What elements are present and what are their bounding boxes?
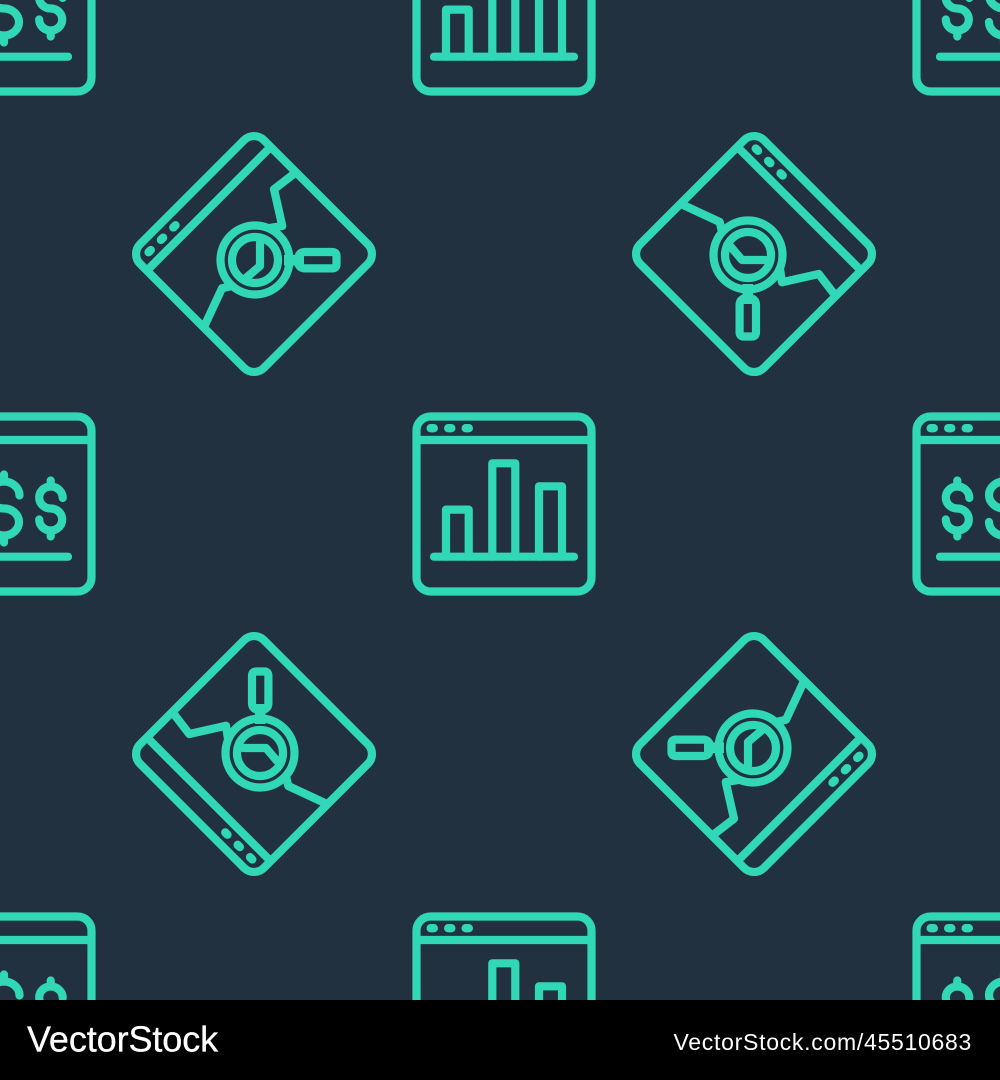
icon: diamond window with magnifier, handle right <box>130 130 378 378</box>
icon: bar chart window, bottom centre <box>416 916 592 1080</box>
window frame <box>630 130 878 378</box>
icon: diamond window with magnifier, handle left <box>630 630 878 878</box>
icon: dollar window, middle left <box>0 416 92 592</box>
magnifier with pie chart <box>714 220 782 336</box>
bar chart <box>434 463 574 557</box>
crack lines <box>172 712 328 804</box>
icon: dollar window, bottom left <box>0 916 92 1080</box>
icon: diamond window with magnifier, handle up <box>130 630 378 878</box>
magnifier with pie chart <box>220 226 336 294</box>
window frame <box>130 630 378 878</box>
icon: dollar window, middle right <box>916 416 1000 592</box>
crack lines <box>204 172 296 328</box>
watermark bar <box>0 1000 1000 1080</box>
icon: bar chart window, centre <box>416 416 592 592</box>
logo text: VectorStock <box>27 1018 219 1060</box>
image id text: VectorStock.com/45510683 <box>674 1029 972 1055</box>
crack lines <box>680 204 836 296</box>
icon: bar chart window, top centre <box>416 0 592 92</box>
window frame <box>630 630 878 878</box>
crack lines <box>712 680 804 836</box>
window frame <box>416 416 592 592</box>
icon: dollar window, top right <box>916 0 1000 92</box>
icon: dollar window, bottom right <box>916 916 1000 1080</box>
icon: diamond window with magnifier, handle down <box>630 130 878 378</box>
magnifier with pie chart <box>672 714 788 782</box>
window frame <box>130 130 378 378</box>
icon: dollar window, top left <box>0 0 92 92</box>
magnifier with pie chart <box>226 672 294 788</box>
